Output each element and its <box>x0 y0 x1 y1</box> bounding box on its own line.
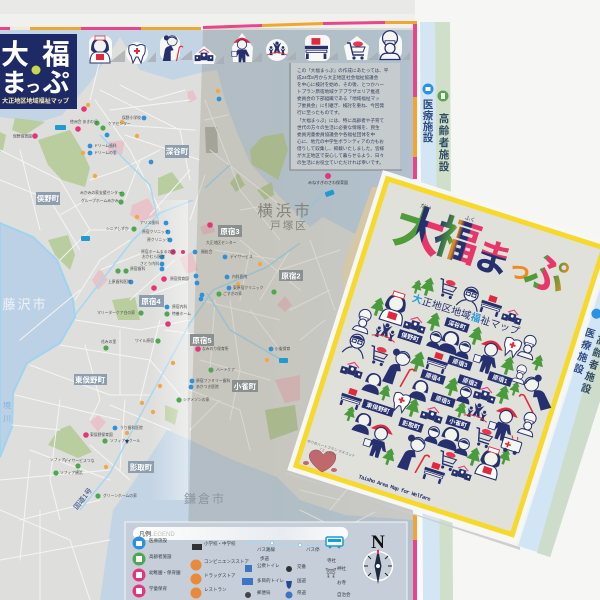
map title panel <box>0 34 77 109</box>
border stripes <box>0 21 417 600</box>
cover title: っ <box>504 254 535 287</box>
icon: child in hat <box>232 38 250 62</box>
booklet tabs <box>516 239 600 557</box>
facility markers: 原宿保育園 <box>170 276 189 281</box>
legend: 凡例 <box>139 530 151 538</box>
legend: 国道 <box>297 577 306 584</box>
cover title: 福 <box>427 209 487 273</box>
cover title: ぷ <box>519 245 573 303</box>
facility markers: 内科医院 <box>232 274 247 279</box>
area names <box>2 202 313 506</box>
icon: kids <box>267 42 287 55</box>
facility markers: 原宿ホームまるの家 <box>141 249 175 254</box>
tan sheet under booklet <box>343 187 378 292</box>
booklet <box>286 165 600 557</box>
facility markers: なみのり保育所 <box>202 346 229 351</box>
cover subtitle: 大正地区地域福祉マップ <box>411 291 521 338</box>
neighbouring area: south (Kamakura) <box>100 430 413 600</box>
district labels: 原宿1 <box>491 373 509 386</box>
intro text box: 行に至ったものです。 <box>297 109 342 116</box>
land base <box>0 30 413 600</box>
facility markers: 小雀保育 <box>275 346 290 351</box>
town name labels: 深谷町 <box>166 146 189 156</box>
facility markers: ハートケア <box>216 367 235 372</box>
compass: N <box>371 532 385 553</box>
facility markers: ソフィアスクール <box>110 438 141 443</box>
heart mascot <box>303 438 356 472</box>
legend: 小学校・中学校 <box>204 540 236 547</box>
district labels <box>361 317 513 433</box>
fold shading <box>186 28 413 600</box>
nursery school marker under text box: みねすぎのさわ保育園 <box>308 179 348 185</box>
intro text box: 借りして収集し、掲載いたしました。皆様 <box>297 145 385 152</box>
icon: bus <box>326 537 343 548</box>
legend: 高齢者施設 <box>149 553 172 560</box>
nursery school marker under text box <box>308 173 348 185</box>
cover title <box>387 195 576 305</box>
legend: コンビニエンスストア <box>204 558 249 565</box>
icon: elder <box>163 35 183 61</box>
tab: 高齢者施設: 者 <box>587 357 600 373</box>
intro text box: 成24年8月から大正地区社会福祉協議会 <box>297 74 379 81</box>
facility markers: うり歯科医院 <box>120 425 143 430</box>
icon: tooth <box>129 44 145 63</box>
tab: 医療施設: 医 <box>423 99 434 111</box>
pictograms <box>338 277 551 485</box>
town name labels: 原宿5 <box>192 335 212 345</box>
area names: 川 <box>3 414 11 423</box>
district labels: 原宿4 <box>424 371 442 384</box>
facility markers: ドリームの里 <box>94 150 117 155</box>
map title panel: っ <box>25 79 41 96</box>
neighbouring area: west (Fujisawa) <box>0 223 75 457</box>
tab: 高齢者施設: 齢 <box>439 124 450 137</box>
tab: 高齢者施設: 高 <box>439 112 449 125</box>
intro text box: この「大福まっぷ」の作成にあたっては、平 <box>297 67 389 74</box>
tab: 高齢者施設: 者 <box>439 136 449 149</box>
map title panel: 大正地区地域福祉マップ <box>2 97 70 105</box>
facility markers: 原宿歯科 <box>130 266 145 271</box>
tab: 高齢者施設 <box>579 333 600 396</box>
legend: 幼稚園・保育園 <box>149 569 181 576</box>
road network <box>0 60 375 600</box>
facility markers: アリス歯科 <box>140 220 159 225</box>
intro text box: トプラン原宿地域ケアプラザエリア推進 <box>297 88 380 95</box>
facility markers: さとう内科 <box>140 261 159 266</box>
intro text box: を中心に検討を始め、その後、とつかハー <box>297 81 385 88</box>
facility markers: 俣野保育園 <box>13 134 32 138</box>
district labels: 原宿3 <box>451 357 469 370</box>
district labels: 原宿2 <box>461 376 479 389</box>
cover illustrations <box>303 275 551 485</box>
facility markers: グリーンホームの家 <box>103 493 137 498</box>
map title panel: ぷ <box>42 68 70 98</box>
tab: 高齢者施設: 施 <box>583 369 597 384</box>
district labels: 俣野町 <box>400 331 420 344</box>
tab: 医療施設: 施 <box>576 349 589 365</box>
map title panel: 福 <box>42 39 70 70</box>
town name labels: 小雀町 <box>234 381 257 391</box>
facility markers: 国道1号 <box>71 486 94 511</box>
trees <box>342 275 546 468</box>
legend: ドラッグストア <box>204 572 236 579</box>
facility markers: デイサービス <box>230 254 253 259</box>
facility markers: みかみの家支援センター <box>80 190 122 195</box>
facility markers: 福祉会 <box>201 249 213 254</box>
icon: desk <box>305 38 328 59</box>
map title panel: 大 <box>1 39 29 70</box>
district labels: 小雀町 <box>448 417 468 430</box>
facility markers: 原宿内科 <box>172 304 187 309</box>
legend: 県道 <box>297 589 306 596</box>
legend: 郵便局 <box>257 589 271 596</box>
intro text box: 世代の方々の生活に必要な情報を、民生 <box>297 124 380 131</box>
facility markers: デイサービスつな <box>64 458 95 463</box>
tab: 高齢者施設: 設 <box>579 382 593 396</box>
intro text box: 心に、地元の中学生ボランティアの力もお <box>297 138 384 145</box>
facility markers: 大正地区センター <box>206 240 237 245</box>
area names: 境 <box>3 400 11 410</box>
facility markers: 原宿クリニック <box>142 229 169 234</box>
tab: 医療施設: 療 <box>580 337 593 353</box>
cover title: 大 <box>387 197 452 265</box>
tab: 医療施設: 設 <box>423 132 434 144</box>
heart mascot: 「とっくん」 <box>318 446 339 457</box>
legend: 歩道 <box>260 555 269 562</box>
map sheet <box>0 21 417 600</box>
legend: ⛩ <box>325 568 337 578</box>
tab: 医療施設: 療 <box>423 109 434 122</box>
district labels: 原宿5 <box>434 394 452 407</box>
legend: LEGEND <box>150 532 175 538</box>
facility markers: ソフィア横浜 <box>60 470 83 475</box>
tab: 医療施設: 医 <box>583 326 597 341</box>
legend: 自治会 <box>337 591 351 598</box>
district labels: 深谷町 <box>447 319 467 332</box>
map title panel: ま <box>1 68 27 98</box>
tab: 医療施設 <box>422 84 434 144</box>
town name labels: 影取町 <box>130 462 153 472</box>
intro text box <box>290 63 402 170</box>
district labels: 影取町 <box>401 419 421 432</box>
legend: レストラン <box>204 587 227 593</box>
icon: cart <box>347 41 365 60</box>
tab: 医療施設: 設 <box>572 362 585 377</box>
icon: nurse <box>90 36 110 63</box>
neighbouring area: north <box>0 30 413 245</box>
main roads and rivers <box>75 135 325 510</box>
area names: 鎌倉市 <box>184 492 226 506</box>
facility markers: おかむら医院 <box>142 254 165 259</box>
intro text box: プ委員会」に引継ぎ、検討を重ね、今回発 <box>297 102 384 109</box>
tab: 高齢者施設: 施 <box>439 148 450 161</box>
tab: 医療施設 <box>572 307 600 377</box>
cover title: だい <box>419 202 432 212</box>
town name labels: 原宿3 <box>220 226 240 236</box>
legend: 神社 <box>337 565 346 572</box>
facility markers: 東俣野保育園 <box>90 432 113 437</box>
icon tags row <box>89 31 410 64</box>
facility markers: 原クリニック <box>147 237 170 242</box>
facility markers <box>13 89 335 511</box>
facility markers: マリーターケア白の家 <box>97 310 135 315</box>
facility markers: ごすぎの家 <box>223 291 242 296</box>
legend <box>125 522 407 600</box>
area names: 藤沢市 <box>2 297 48 312</box>
intro text box: 「大福まっぷ」には、特に高齢者や子育て <box>297 117 385 124</box>
area names: 横浜市 <box>257 202 313 220</box>
facility markers: ソフィア <box>50 457 65 462</box>
town name labels: 原宿2 <box>281 270 301 280</box>
town name labels: 原宿4 <box>141 296 161 306</box>
facility markers: ワイル原宿 <box>135 338 154 343</box>
legend: 公衆トイレ <box>257 562 280 569</box>
legend: バス路線 <box>257 546 275 553</box>
facility markers: 原宿ファミリー歯科 <box>196 378 230 383</box>
index tabs behind map <box>417 22 453 600</box>
legend: お寺 <box>337 579 346 585</box>
facility markers: 特養ホーム <box>172 311 191 316</box>
icon: building <box>195 49 213 61</box>
legend: 交番 <box>297 563 306 570</box>
school zones <box>90 90 300 432</box>
tab: 高齢者施設 <box>438 90 450 173</box>
legend: バス停 <box>306 546 320 552</box>
cover title: ふく <box>464 214 476 224</box>
facility markers: ケアセンター <box>108 121 131 126</box>
facility markers: 俣野小学校 <box>122 115 141 120</box>
area names: 戸塚区 <box>270 220 308 232</box>
legend: 寺社 <box>327 557 336 564</box>
icon: chef <box>380 31 400 60</box>
booklet shadow <box>284 472 520 550</box>
compass <box>364 532 392 584</box>
intro text box: の生活にお役立ていただければ幸いです。 <box>297 159 384 166</box>
tab: 医療施設: 施 <box>423 120 434 133</box>
town name labels <box>36 145 303 473</box>
facility markers: グループホームみかみ <box>81 198 119 203</box>
facility markers: シニアしずか <box>106 226 129 231</box>
legend: 学童保育 <box>149 585 167 592</box>
tab: 高齢者施設: 設 <box>439 161 450 173</box>
intro text box: 委員児童委員協議会や各福祉団体を中 <box>297 131 376 138</box>
district labels: 東俣野町 <box>365 401 391 416</box>
facility markers: 上原歯科医院 <box>108 279 131 284</box>
English caption: Taisho Area Map for Welfare <box>358 473 432 503</box>
town name labels: 俣野町 <box>37 193 60 203</box>
legend: 多目的トイレ <box>257 577 284 584</box>
intro text box: 委員会の下部組織である「地域福祉マッ <box>297 95 380 102</box>
facility markers: ドリーム歯科 <box>94 143 117 148</box>
facility markers: 徳洲会 あきの丘 <box>70 119 98 124</box>
intro text box: が大正地区で安心して暮らせるよう、日々 <box>297 152 384 159</box>
grey green patch <box>205 127 218 153</box>
cover title: ま <box>467 234 516 285</box>
facility markers: あかつき医院 <box>196 384 219 389</box>
parks <box>0 118 298 458</box>
heart mascot: ゆりのハートプラン マスコット <box>307 438 356 458</box>
facility markers: シアメゾンの家 <box>183 397 210 402</box>
facility markers: 花みの里 <box>101 339 116 344</box>
facility markers: 東原宿クリニック <box>233 285 264 290</box>
legend: 医療施設 <box>149 537 167 544</box>
town name labels: 東俣野町 <box>75 374 105 384</box>
booklet cover <box>287 170 600 543</box>
